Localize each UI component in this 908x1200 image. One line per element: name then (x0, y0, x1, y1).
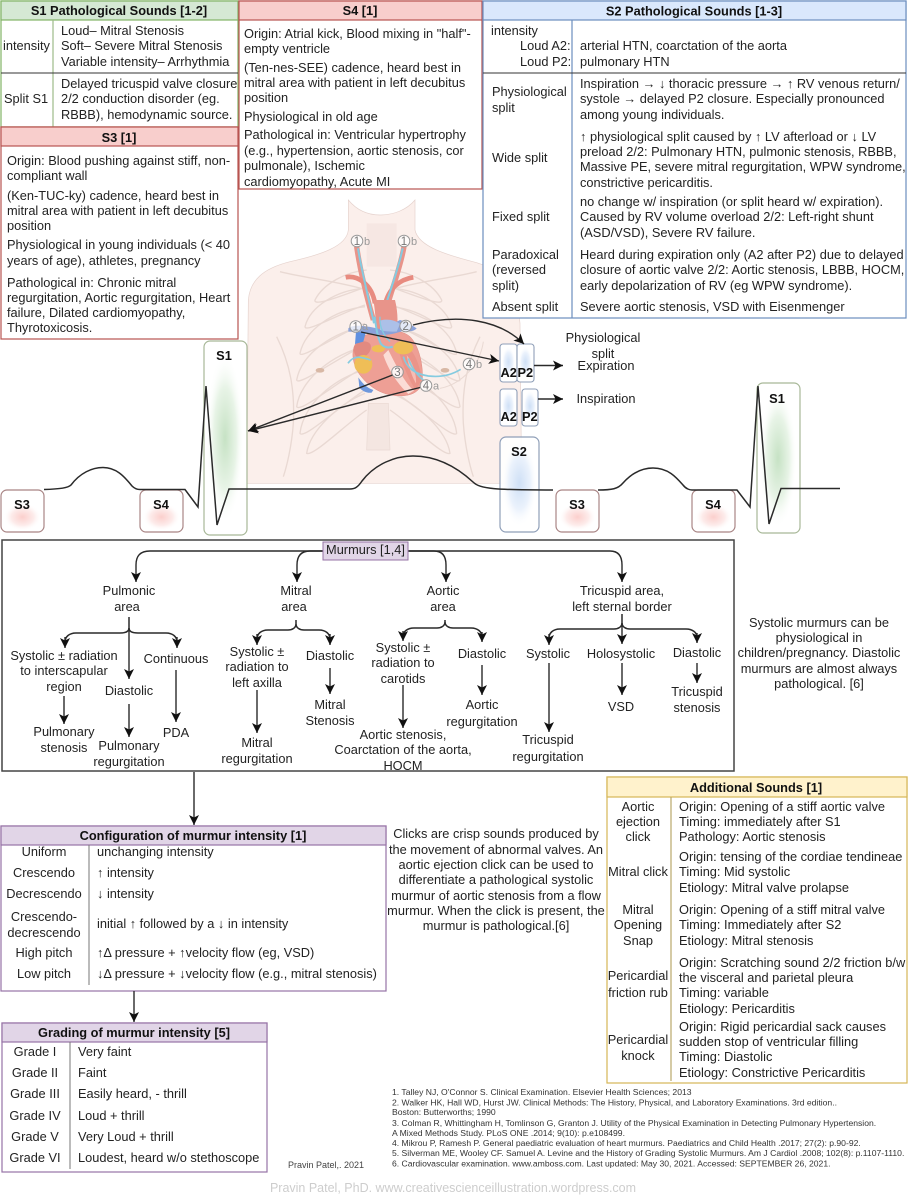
references: A Mixed Methods Study. PLoS ONE .2014; 9(10): p.e108499. (392, 1128, 625, 1138)
panel: S4 (239, 1, 482, 189)
panel: S1 pathological sounds: Split S1 (4, 91, 48, 106)
heart (348, 300, 483, 396)
sound box: S4 right (692, 490, 735, 532)
references: 3. Colman R, Whittingham H, Tomlinson G, Granton J. Utility of the Physical Examination in Detecting Pulmonary Hypertension. (392, 1118, 876, 1128)
panel: S1 pathological sounds: Soft– Severe Mitral Stenosis (61, 38, 222, 53)
references (392, 1087, 904, 1168)
murmurs title box: Murmurs [1,4] (326, 542, 405, 557)
tricuspid area branch: left sternal border (572, 599, 673, 614)
panel: additional sounds: knock (621, 1048, 655, 1063)
panel: S2 pathological sounds: intensity (491, 23, 539, 38)
panel: S2 pathological sounds: early depolarization of RV (eg WPW syndrome). (580, 278, 852, 293)
panel: configuration of murmur intensity: initial ↑ followed by a ↓ in intensity (97, 916, 289, 931)
phonocardiogram trace (44, 386, 840, 525)
auscultation point labels: 2 (402, 321, 409, 333)
aortic area branch: Aortic stenosis, (360, 727, 446, 742)
panel: additional sounds: ejection (616, 814, 660, 829)
references: 6. Cardiovascular examination. www.amboss.com. Last updated: May 30, 2021. Accessed: SEPTEMBER 26, 2021. (392, 1158, 831, 1168)
panel: additional sounds: Mitral (622, 902, 654, 917)
sound box: S3 left (1, 490, 44, 532)
sound box: S2 (500, 437, 539, 532)
auscultation point labels: a (362, 321, 369, 333)
mitral area branch: Systolic ± (230, 644, 284, 659)
note: systolic and diastolic murmurs: pathological. [6] (774, 676, 864, 691)
panel: grading of murmur intensity: Loud + thrill (78, 1108, 145, 1123)
author credit: Pravin Patel,. 2021 (288, 1160, 364, 1170)
references: 4. Mikrou P, Ramesh P. General paediatric evaluation of heart murmurs. Paediatrics and Child Health .2017; 27(2): p.90-92. (392, 1138, 861, 1148)
label: physiological split: Expiration (578, 358, 634, 373)
panel: S4: (e.g., hypertension, aortic stenosis, cor (244, 143, 465, 158)
auscultation point labels: b (476, 359, 482, 371)
pulmonic area branch: Pulmonary (33, 724, 95, 739)
panel: S3: Physiological in young individuals (< 40 (7, 237, 230, 252)
panel: configuration of murmur intensity: ↑ intensity (97, 865, 155, 880)
panel: S4: pulmonale), Ischemic (244, 158, 366, 173)
mitral area branch: Diastolic (306, 648, 355, 663)
sound box: S3 right: S3 (569, 497, 585, 512)
split boxes: expiration A2 P2: P2 (518, 365, 533, 380)
panel: S2 pathological sounds: Physiological (492, 84, 567, 99)
panel: S3: Thyrotoxicosis. (7, 320, 92, 335)
references: 1. Talley NJ, O'Connor S. Clinical Examination. Elsevier Health Sciences; 2013 (392, 1087, 692, 1097)
panel: grading of murmur intensity: Loudest, heard w/o stethoscope (78, 1150, 259, 1165)
tricuspid area branch: regurgitation (512, 749, 584, 764)
panel: additional sounds: Origin: Opening of a stiff aortic valve (679, 799, 885, 814)
panel: S2 pathological sounds: no change w/ inspiration (or split heard w/ expiration). (580, 194, 883, 209)
panel: S3 (1, 127, 238, 339)
pulmonic area branch: area (114, 599, 141, 614)
references: 2. Walker HK, Hall WD, Hurst JW. Clinical Methods: The History, Physical, and Laboratory Examinations. 3rd edition.. (392, 1098, 837, 1108)
panel: additional sounds: Timing: Immediately after S2 (679, 917, 841, 932)
tricuspid area branch: VSD (608, 699, 634, 714)
panel: S4: Pathological in: Ventricular hypertrophy (244, 127, 467, 142)
panel: additional sounds: Etiology: Mitral valve prolapse (679, 880, 849, 895)
mitral area branch: Stenosis (305, 713, 355, 728)
note: clicks: the movement of abnormal valves. An (389, 842, 603, 857)
panel: additional sounds: Etiology: Constrictive Pericarditis (679, 1065, 865, 1080)
panel: grading of murmur intensity (2, 1023, 267, 1172)
panel: configuration of murmur intensity (1, 826, 386, 991)
panel: S1 pathological sounds: S1 Pathological Sounds [1-2] (31, 3, 207, 18)
panel: additional sounds: Origin: Rigid pericardial sack causes (679, 1019, 886, 1034)
tricuspid area branch: Tricuspid (522, 732, 574, 747)
panel: configuration of murmur intensity: ↑Δ pressure + ↑velocity flow (eg, VSD) (97, 945, 314, 960)
pulmonic area branch: region (46, 679, 82, 694)
pulmonic area branch: stenosis (41, 740, 87, 755)
auscultation point labels: b (364, 236, 370, 248)
auscultation point labels: 4 (423, 380, 430, 392)
note: clicks (387, 826, 605, 933)
panel: S2 pathological sounds: Paradoxical (492, 247, 559, 262)
mitral area branch: area (281, 599, 308, 614)
aortic area branch: Coarctation of the aorta, (334, 742, 472, 757)
panel: murmurs flowchart (2, 540, 734, 773)
panel: S4: empty ventricle (244, 41, 330, 56)
mitral area branch: Mitral (314, 697, 346, 712)
panel: additional sounds: Origin: Opening of a stiff mitral valve (679, 902, 885, 917)
panel: grading of murmur intensity: Very Loud + thrill (78, 1129, 174, 1144)
panel: S2 pathological sounds: pulmonary HTN (580, 54, 670, 69)
panel: additional sounds: Pericardial (608, 968, 668, 983)
references: Boston: Butterworths; 1990 (392, 1107, 496, 1117)
tricuspid area branch (512, 583, 723, 764)
panel: configuration of murmur intensity: Low pitch (17, 966, 71, 981)
panel: S3: Pathological in: Chronic mitral (7, 275, 176, 290)
panel: grading of murmur intensity: Grade III (10, 1086, 60, 1101)
aortic area branch: radiation to (371, 655, 435, 670)
references: 5. Silverman ME, Wooley CF. Samuel A. Levine and the History of Grading Systolic Murmurs. Am J Cardiol .2008; 102(8): p.1107-1110. (392, 1148, 904, 1158)
sound box: S1 left: S1 (216, 348, 232, 363)
panel: S3: regurgitation, Aortic regurgitation, Heart (7, 290, 231, 305)
panel: configuration of murmur intensity: decrescendo (7, 925, 81, 940)
split boxes: expiration A2 P2 (500, 344, 534, 382)
auscultation point labels: 1 (354, 236, 360, 248)
panel: additional sounds: friction rub (608, 985, 668, 1000)
panel: S1 pathological sounds: Loud– Mitral Stenosis (61, 23, 184, 38)
panel: additional sounds: Timing: immediately after S1 (679, 814, 841, 829)
panel: S2 pathological sounds: Massive PE, severe mitral regurgitation, WPW syndrome, (580, 159, 906, 174)
note: clicks: aortic ejection click can be used to (399, 857, 593, 872)
panel: additional sounds: Timing: Mid systolic (679, 864, 791, 879)
auscultation point labels: b (411, 236, 417, 248)
panel: additional sounds: Etiology: Mitral stenosis (679, 933, 813, 948)
panel: S4: Physiological in old age (244, 109, 378, 124)
panel: S1 pathological sounds: Variable intensity– Arrhythmia (61, 54, 230, 69)
panel: additional sounds: Etiology: Pericarditis (679, 1001, 795, 1016)
panel: S4: S4 [1] (343, 3, 377, 18)
panel: S1 pathological sounds: 2/2 conduction disorder (eg. (61, 91, 220, 106)
panel: S1 pathological sounds: Delayed tricuspid valve closure (61, 76, 237, 91)
note: clicks: murmur. When the click is present, the (387, 903, 605, 918)
tricuspid area branch: Tricuspid area, (580, 583, 664, 598)
pulmonic area branch: Continuous (144, 651, 208, 666)
panel: S3: compliant wall (7, 168, 87, 183)
mitral area branch: left axilla (232, 675, 283, 690)
pulmonic area branch: to interscapular (20, 663, 108, 678)
auscultation point labels: 4 (466, 359, 473, 371)
auscultation point labels: 1 (401, 236, 407, 248)
panel: S4: cardiomyopathy, Acute MI (244, 174, 390, 189)
panel: S2 pathological sounds: split) (492, 278, 519, 293)
arrow: configuration to grading (133, 991, 135, 1022)
panel: S4: position (244, 90, 288, 105)
panel: configuration of murmur intensity: ↓ intensity (97, 886, 155, 901)
panel: additional sounds: Pericardial (608, 1032, 668, 1047)
pulmonic area branch: Pulmonic (103, 583, 156, 598)
note: systolic and diastolic murmurs: murmurs are almost always (741, 661, 897, 676)
panel: S2 pathological sounds: split (492, 100, 515, 115)
panel: additional sounds: Pathology: Aortic stenosis (679, 829, 826, 844)
sound box: S1 right (757, 383, 800, 533)
pulmonic area branch (10, 583, 208, 769)
panel: S2 pathological sounds: Heard during expiration only (A2 after P2) due to delayed (580, 247, 904, 262)
aortic area branch (334, 583, 518, 773)
panel: S1 pathological sounds: intensity (3, 38, 51, 53)
panel: configuration of murmur intensity: ↓Δ pressure + ↓velocity flow (e.g., mitral stenosis) (97, 966, 377, 981)
aortic area branch: area (430, 599, 457, 614)
sound box: S4 left (140, 490, 183, 532)
panel: S2 pathological sounds: Fixed split (492, 209, 550, 224)
watermark: Pravin Patel, PhD. www.creativescienceillustration.wordpress.com (270, 1181, 636, 1195)
split boxes: inspiration A2 P2 (500, 389, 538, 426)
label: physiological split (566, 330, 640, 406)
pulmonic area branch: Systolic ± radiation (10, 648, 118, 663)
sound box: S3 right (556, 490, 599, 532)
panel: S3: mitral area with patient in left decubitus (7, 203, 228, 218)
split outcome arrows (534, 366, 563, 399)
panel: configuration of murmur intensity: unchanging intensity (97, 844, 214, 859)
tricuspid area branch: Holosystolic (587, 646, 656, 661)
panel: S2 pathological sounds: closure of aortic valve 2/2: Aortic stenosis, LBBB, HOCM, (580, 262, 904, 277)
panel: configuration of murmur intensity: High pitch (16, 945, 72, 960)
panel: S1 pathological sounds (1, 1, 238, 127)
panel: S2 pathological sounds: arterial HTN, coarctation of the aorta (580, 38, 788, 53)
panel: S2 pathological sounds: Loud P2: (520, 54, 571, 69)
panel: S2 pathological sounds: constrictive pericarditis. (580, 175, 713, 190)
arrow: murmurs to configuration (193, 772, 195, 825)
panel: S2 pathological sounds: Loud A2: (520, 38, 571, 53)
panel: configuration of murmur intensity: Crescendo (13, 865, 75, 880)
panel: additional sounds: Aortic (622, 799, 655, 814)
panel: configuration of murmur intensity: Configuration of murmur intensity [1] (80, 828, 306, 843)
note: clicks: murmur of aortic stenosis from a flow (391, 888, 602, 903)
sound box: S4 right: S4 (705, 497, 722, 512)
panel: configuration of murmur intensity: Crescendo- (11, 909, 77, 924)
aortic area branch: HOCM (383, 758, 423, 773)
panel: additional sounds: Mitral click (608, 864, 668, 879)
panel: grading of murmur intensity: Very faint (78, 1044, 132, 1059)
auscultation point labels: a (433, 380, 440, 392)
panel: S3: Origin: Blood pushing against stiff, non- (7, 153, 230, 168)
panel: additional sounds: Timing: variable (679, 985, 769, 1000)
aortic area branch: regurgitation (446, 714, 518, 729)
pulmonic area branch: Diastolic (105, 683, 154, 698)
panel: additional sounds: Opening (614, 917, 662, 932)
mitral area branch: Mitral (241, 735, 273, 750)
panel: S2 pathological sounds: systole → delayed P2 closure. Especially pronounced (580, 91, 884, 106)
panel: configuration of murmur intensity: Decrescendo (6, 886, 82, 901)
panel: S1 pathological sounds: RBBB), hemodynamic source. (61, 107, 232, 122)
panel: S2 pathological sounds: Severe aortic stenosis, VSD with Eisenmenger (580, 299, 845, 314)
note: clicks: murmur is pathological.[6] (423, 918, 569, 933)
tricuspid area branch: Tricuspid (671, 684, 723, 699)
branch arrows from murmurs header (136, 551, 622, 582)
panel: additional sounds: Snap (623, 933, 653, 948)
aortic area branch: Systolic ± (376, 640, 430, 655)
panel: S2 pathological sounds: (reversed (492, 262, 546, 277)
pulmonic area branch: PDA (163, 725, 190, 740)
panel: additional sounds (607, 777, 907, 1083)
label: physiological split: Physiological (566, 330, 640, 345)
panel: grading of murmur intensity: Grade IV (9, 1108, 61, 1123)
panel: S3: S3 [1] (102, 130, 136, 145)
split boxes: expiration A2 P2: A2 (500, 365, 517, 380)
auscultation point labels: 3 (394, 367, 401, 379)
pulmonic area branch: Pulmonary (98, 738, 160, 753)
auscultation point labels: 1 (352, 322, 359, 334)
panel: S2 pathological sounds: Inspiration → ↓ thoracic pressure → ↑ RV venous return/ (580, 76, 900, 91)
split boxes: inspiration A2 P2: P2 (522, 409, 538, 424)
mitral area branch: regurgitation (221, 751, 293, 766)
panel: S3: position (7, 218, 51, 233)
note: clicks: Clicks are crisp sounds produced by (393, 826, 599, 841)
note: systolic and diastolic murmurs: children/pregnancy. Diastolic (738, 645, 901, 660)
panel: additional sounds: Additional Sounds [1] (690, 780, 822, 795)
panel: additional sounds: sudden stop of ventricular filling (679, 1034, 858, 1049)
mitral area branch (221, 583, 355, 766)
auscultation point markers (350, 235, 475, 391)
panel: S3: (Ken-TUC-ky) cadence, heard best in (7, 188, 219, 203)
panel: S2 pathological sounds: among young individuals. (580, 107, 724, 122)
mitral area branch: Mitral (280, 583, 312, 598)
note: systolic and diastolic murmurs: Systolic murmurs can be (749, 615, 889, 630)
panel: S3: failure, Dilated cardiomyopathy, (7, 305, 185, 320)
sound box: S1 left (204, 341, 247, 535)
panel: S2 pathological sounds: preload 2/2: Pulmonary HTN, pulmonic stenosis, RBBB, (580, 144, 897, 159)
panel: additional sounds: Origin: Scratching sound 2/2 friction b/w (679, 955, 906, 970)
panel: S2 pathological sounds: S2 Pathological Sounds [1-3] (606, 4, 782, 18)
panel: grading of murmur intensity: Grade V (11, 1129, 59, 1144)
panel: grading of murmur intensity: Grade II (12, 1065, 58, 1080)
panel: grading of murmur intensity: Grade VI (9, 1150, 61, 1165)
panel: S2 pathological sounds: Caused by RV volume overload 2/2: Left-right shunt (580, 209, 874, 224)
label: physiological split: Inspiration (576, 391, 636, 406)
aortic area branch: Aortic (427, 583, 460, 598)
aortic area branch: carotids (381, 671, 425, 686)
sound box: S3 left: S3 (14, 497, 30, 512)
panel: grading of murmur intensity: Grading of murmur intensity [5] (38, 1025, 230, 1040)
aortic area branch: Aortic (466, 697, 499, 712)
panel: additional sounds: Origin: tensing of the cordiae tendineae (679, 849, 902, 864)
panel: S4: mitral area with patient in left decubitus (244, 75, 465, 90)
panel: grading of murmur intensity: Faint (78, 1065, 107, 1080)
note: systolic and diastolic murmurs (738, 615, 901, 691)
sound box: S2: S2 (511, 444, 527, 459)
panel: configuration of murmur intensity: Uniform (22, 844, 66, 859)
auscultation point labels (352, 236, 482, 392)
note: clicks: differentiate a pathological systolic (399, 872, 594, 887)
aortic area branch: Diastolic (458, 646, 507, 661)
panel: additional sounds: Timing: Diastolic (679, 1049, 773, 1064)
pulmonic area branch: regurgitation (93, 754, 165, 769)
illustration: torso with heart and auscultation points (247, 200, 522, 483)
note: systolic and diastolic murmurs: physiological in (776, 630, 862, 645)
tricuspid area branch: Diastolic (673, 645, 722, 660)
panel: S2 pathological sounds: Wide split (492, 150, 548, 165)
panel: S4: Origin: Atrial kick, Blood mixing in "half"- (244, 26, 471, 41)
panel: additional sounds: click (626, 829, 651, 844)
panel: S2 pathological sounds (483, 1, 906, 318)
panel: S2 pathological sounds: (ASD/VSD), Severe RV failure. (580, 225, 755, 240)
mitral area branch: radiation to (225, 659, 289, 674)
panel: S4: (Ten-nes-SEE) cadence, heard best in (244, 60, 461, 75)
sound box: S4 left: S4 (153, 497, 170, 512)
tricuspid area branch: stenosis (674, 700, 720, 715)
split boxes: inspiration A2 P2: A2 (500, 409, 517, 424)
panel: grading of murmur intensity: Easily heard, - thrill (78, 1086, 187, 1101)
arrows from heart to sounds (248, 319, 524, 431)
label: physiological split: split (592, 346, 615, 361)
panel: S2 pathological sounds: Absent split (492, 299, 559, 314)
panel: additional sounds: the visceral and parietal pleura (679, 970, 854, 985)
panel: S3: years of age), athletes, pregnancy (7, 253, 201, 268)
panel: grading of murmur intensity: Grade I (14, 1044, 56, 1059)
panel: S2 pathological sounds: ↑ physiological split caused by ↑ LV afterload or ↓ LV (580, 129, 877, 144)
sound box: S1 right: S1 (769, 391, 785, 406)
tricuspid area branch: Systolic (526, 646, 571, 661)
